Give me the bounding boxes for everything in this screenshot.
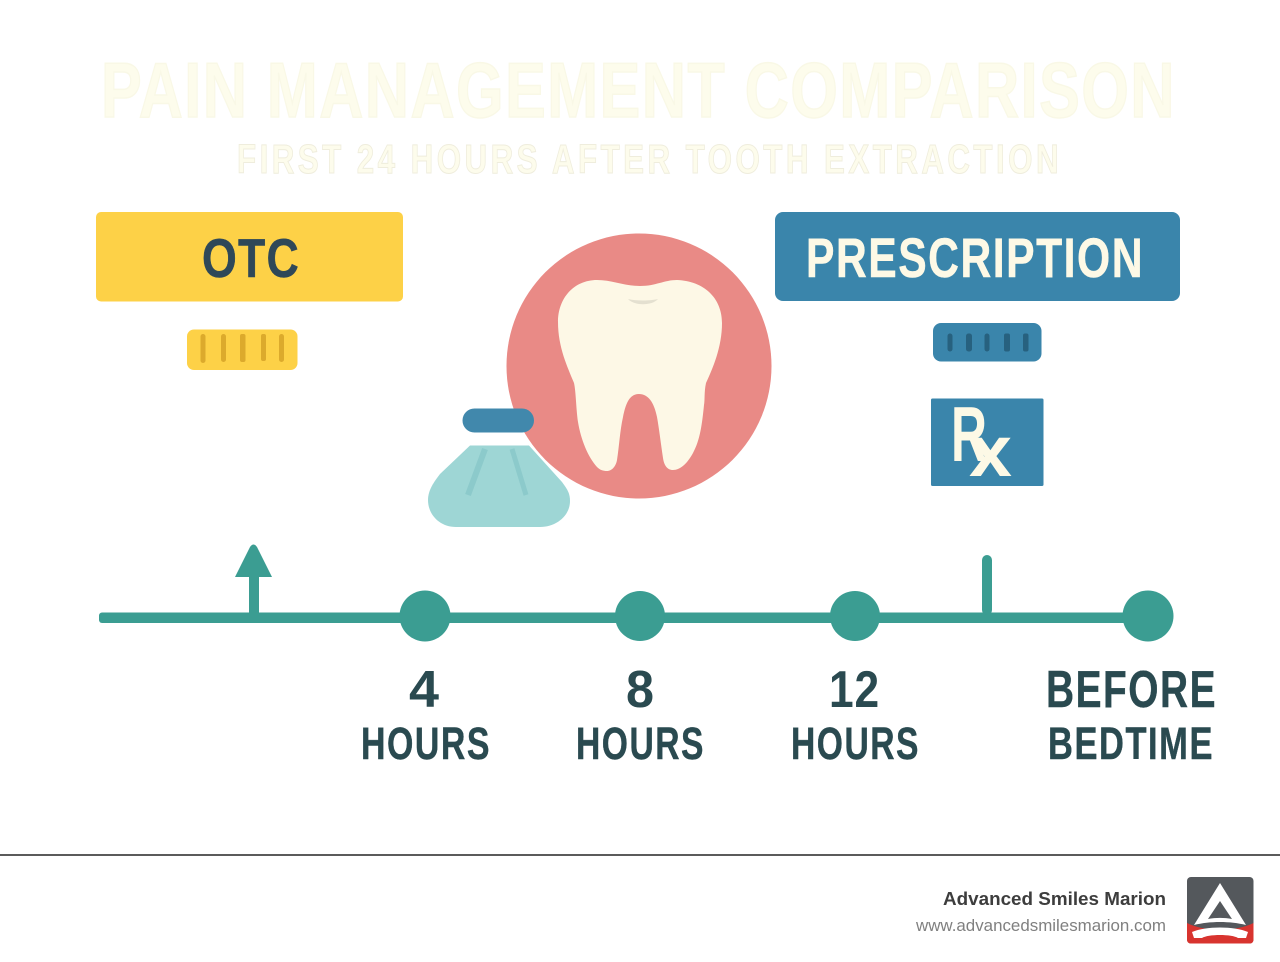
timeline marker: 12 hours xyxy=(791,591,920,769)
timeline marker: 8 hours: 8 xyxy=(626,661,654,719)
icon: Rx symbol: R xyxy=(951,390,987,478)
footer divider xyxy=(0,854,1280,856)
timeline marker: 12 hours: 12 xyxy=(829,661,880,719)
icon: tooth in circle xyxy=(506,234,772,498)
icon: Rx symbol: x xyxy=(969,412,1012,492)
icon: OTC pill xyxy=(187,330,298,370)
icon: ice pack xyxy=(428,408,570,527)
footer brand text xyxy=(915,888,1166,935)
timeline marker: 4 hours: 4 xyxy=(409,661,439,719)
panel: prescription label: PRESCRIPTION xyxy=(806,226,1144,289)
panel: OTC label: OTC xyxy=(202,227,300,289)
timeline marker: before bedtime xyxy=(1046,590,1217,769)
panel: prescription label xyxy=(775,212,1180,301)
panel: OTC label xyxy=(96,212,403,302)
timeline line xyxy=(99,612,1159,623)
marker: prescription dose tick xyxy=(982,555,992,615)
icon: Rx symbol xyxy=(931,390,1044,492)
timeline marker: before bedtime: BEFORE xyxy=(1046,661,1217,719)
footer brand text: Advanced Smiles Marion xyxy=(943,888,1166,909)
timeline marker: 12 hours: HOURS xyxy=(791,718,920,769)
timeline marker: 4 hours xyxy=(361,590,491,769)
timeline marker: before bedtime: BEDTIME xyxy=(1048,718,1214,769)
arrow: OTC dose start xyxy=(235,544,272,616)
footer brand text: www.advancedsmilesmarion.com xyxy=(915,917,1166,935)
timeline marker: 8 hours: HOURS xyxy=(576,718,705,769)
icon: brand logo xyxy=(1187,877,1254,944)
timeline marker: 4 hours: HOURS xyxy=(361,718,491,769)
timeline marker: 8 hours xyxy=(576,591,705,769)
icon: prescription pill xyxy=(933,323,1042,362)
